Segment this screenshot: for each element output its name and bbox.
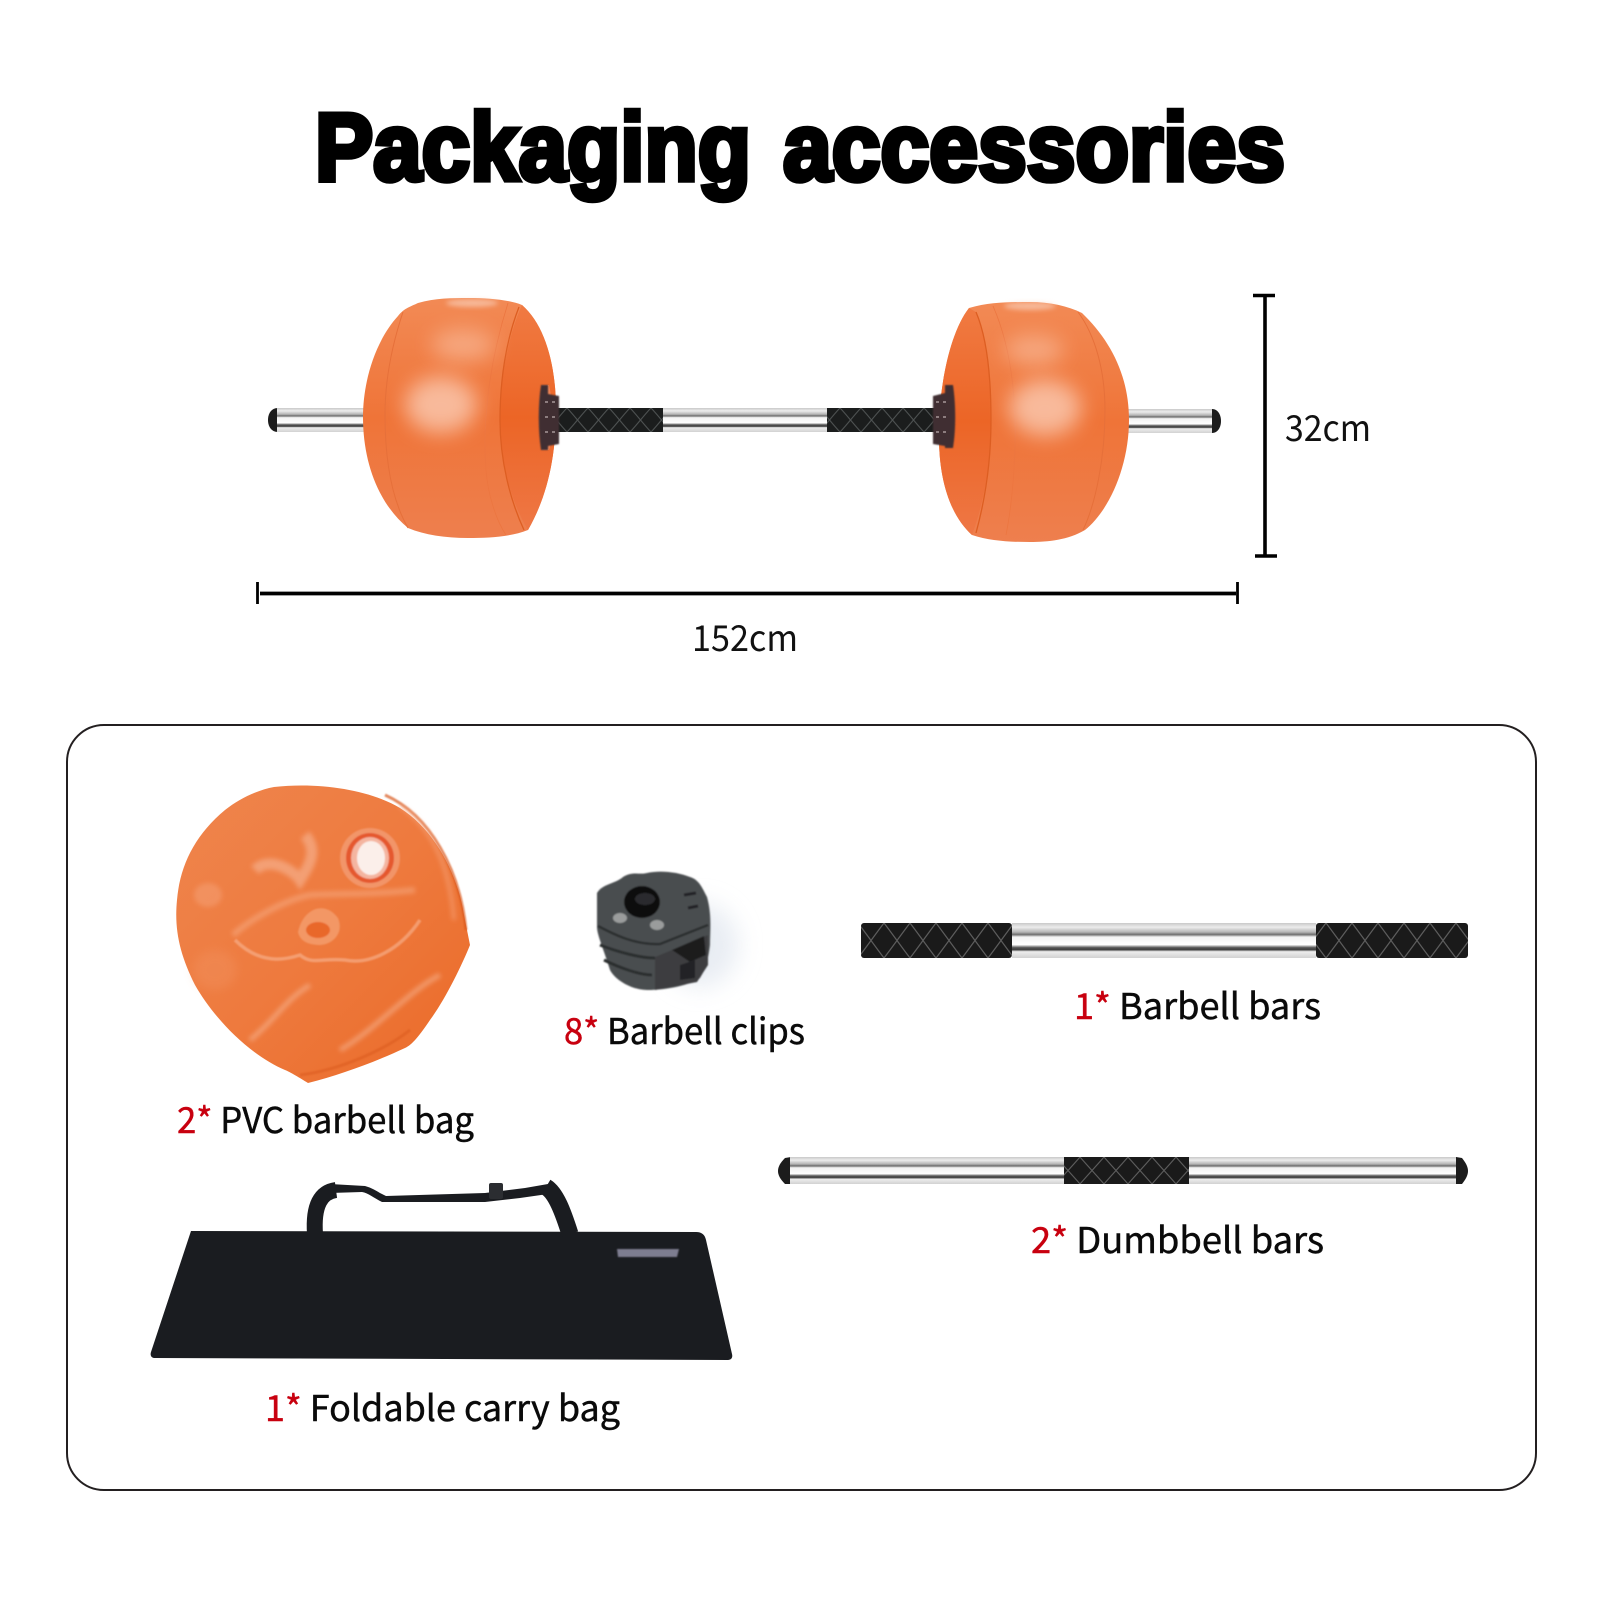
icon: dumbbell bar bbox=[778, 1157, 1468, 1184]
item: barbell clips bbox=[564, 872, 805, 1055]
label: 2* Dumbbell bars: 2* Dumbbell bars bbox=[1031, 1213, 1324, 1264]
dimension: length 152cm bbox=[258, 582, 1238, 662]
label: 8* Barbell clips: 8* Barbell clips bbox=[564, 1004, 805, 1055]
dimension: length 152cm: 152cm bbox=[692, 610, 798, 662]
label: 2* PVC barbell bag: 2* PVC barbell bag bbox=[177, 1093, 474, 1144]
dimension: height 32cm bbox=[1253, 295, 1371, 556]
item: foldable carry bag bbox=[151, 1183, 732, 1432]
item: dumbbell bars bbox=[778, 1157, 1468, 1264]
panel: package contents bbox=[67, 725, 1536, 1490]
bar: centre chrome bbox=[663, 408, 827, 432]
icon: carry bag bbox=[151, 1183, 732, 1360]
icon: orange PVC bag bbox=[176, 786, 470, 1083]
right water weight bbox=[939, 302, 1129, 542]
dimension: height 32cm: 32cm bbox=[1285, 400, 1371, 452]
panel frame bbox=[67, 725, 1536, 1490]
icon: barbell bar bbox=[861, 923, 1468, 958]
bar: left grip bbox=[555, 408, 663, 432]
bar: right chrome end bbox=[1125, 409, 1221, 433]
title: accessories bbox=[783, 94, 1285, 201]
bar: left chrome end bbox=[268, 408, 367, 432]
left barbell clip bbox=[539, 385, 559, 450]
item: barbell bars bbox=[861, 923, 1468, 1030]
title bbox=[315, 94, 1285, 201]
icon: barbell clips bbox=[597, 872, 738, 990]
barbell assembled product bbox=[268, 298, 1221, 542]
right barbell clip bbox=[933, 385, 955, 448]
title: Packaging bbox=[315, 94, 751, 201]
bar: right grip bbox=[827, 408, 935, 432]
label: 1* Barbell bars: 1* Barbell bars bbox=[1074, 979, 1321, 1030]
label: 1* Foldable carry bag: 1* Foldable carry bag bbox=[265, 1381, 620, 1432]
bag logo bbox=[617, 1249, 679, 1257]
left water weight bbox=[363, 298, 556, 538]
item: PVC barbell bag bbox=[176, 786, 474, 1144]
